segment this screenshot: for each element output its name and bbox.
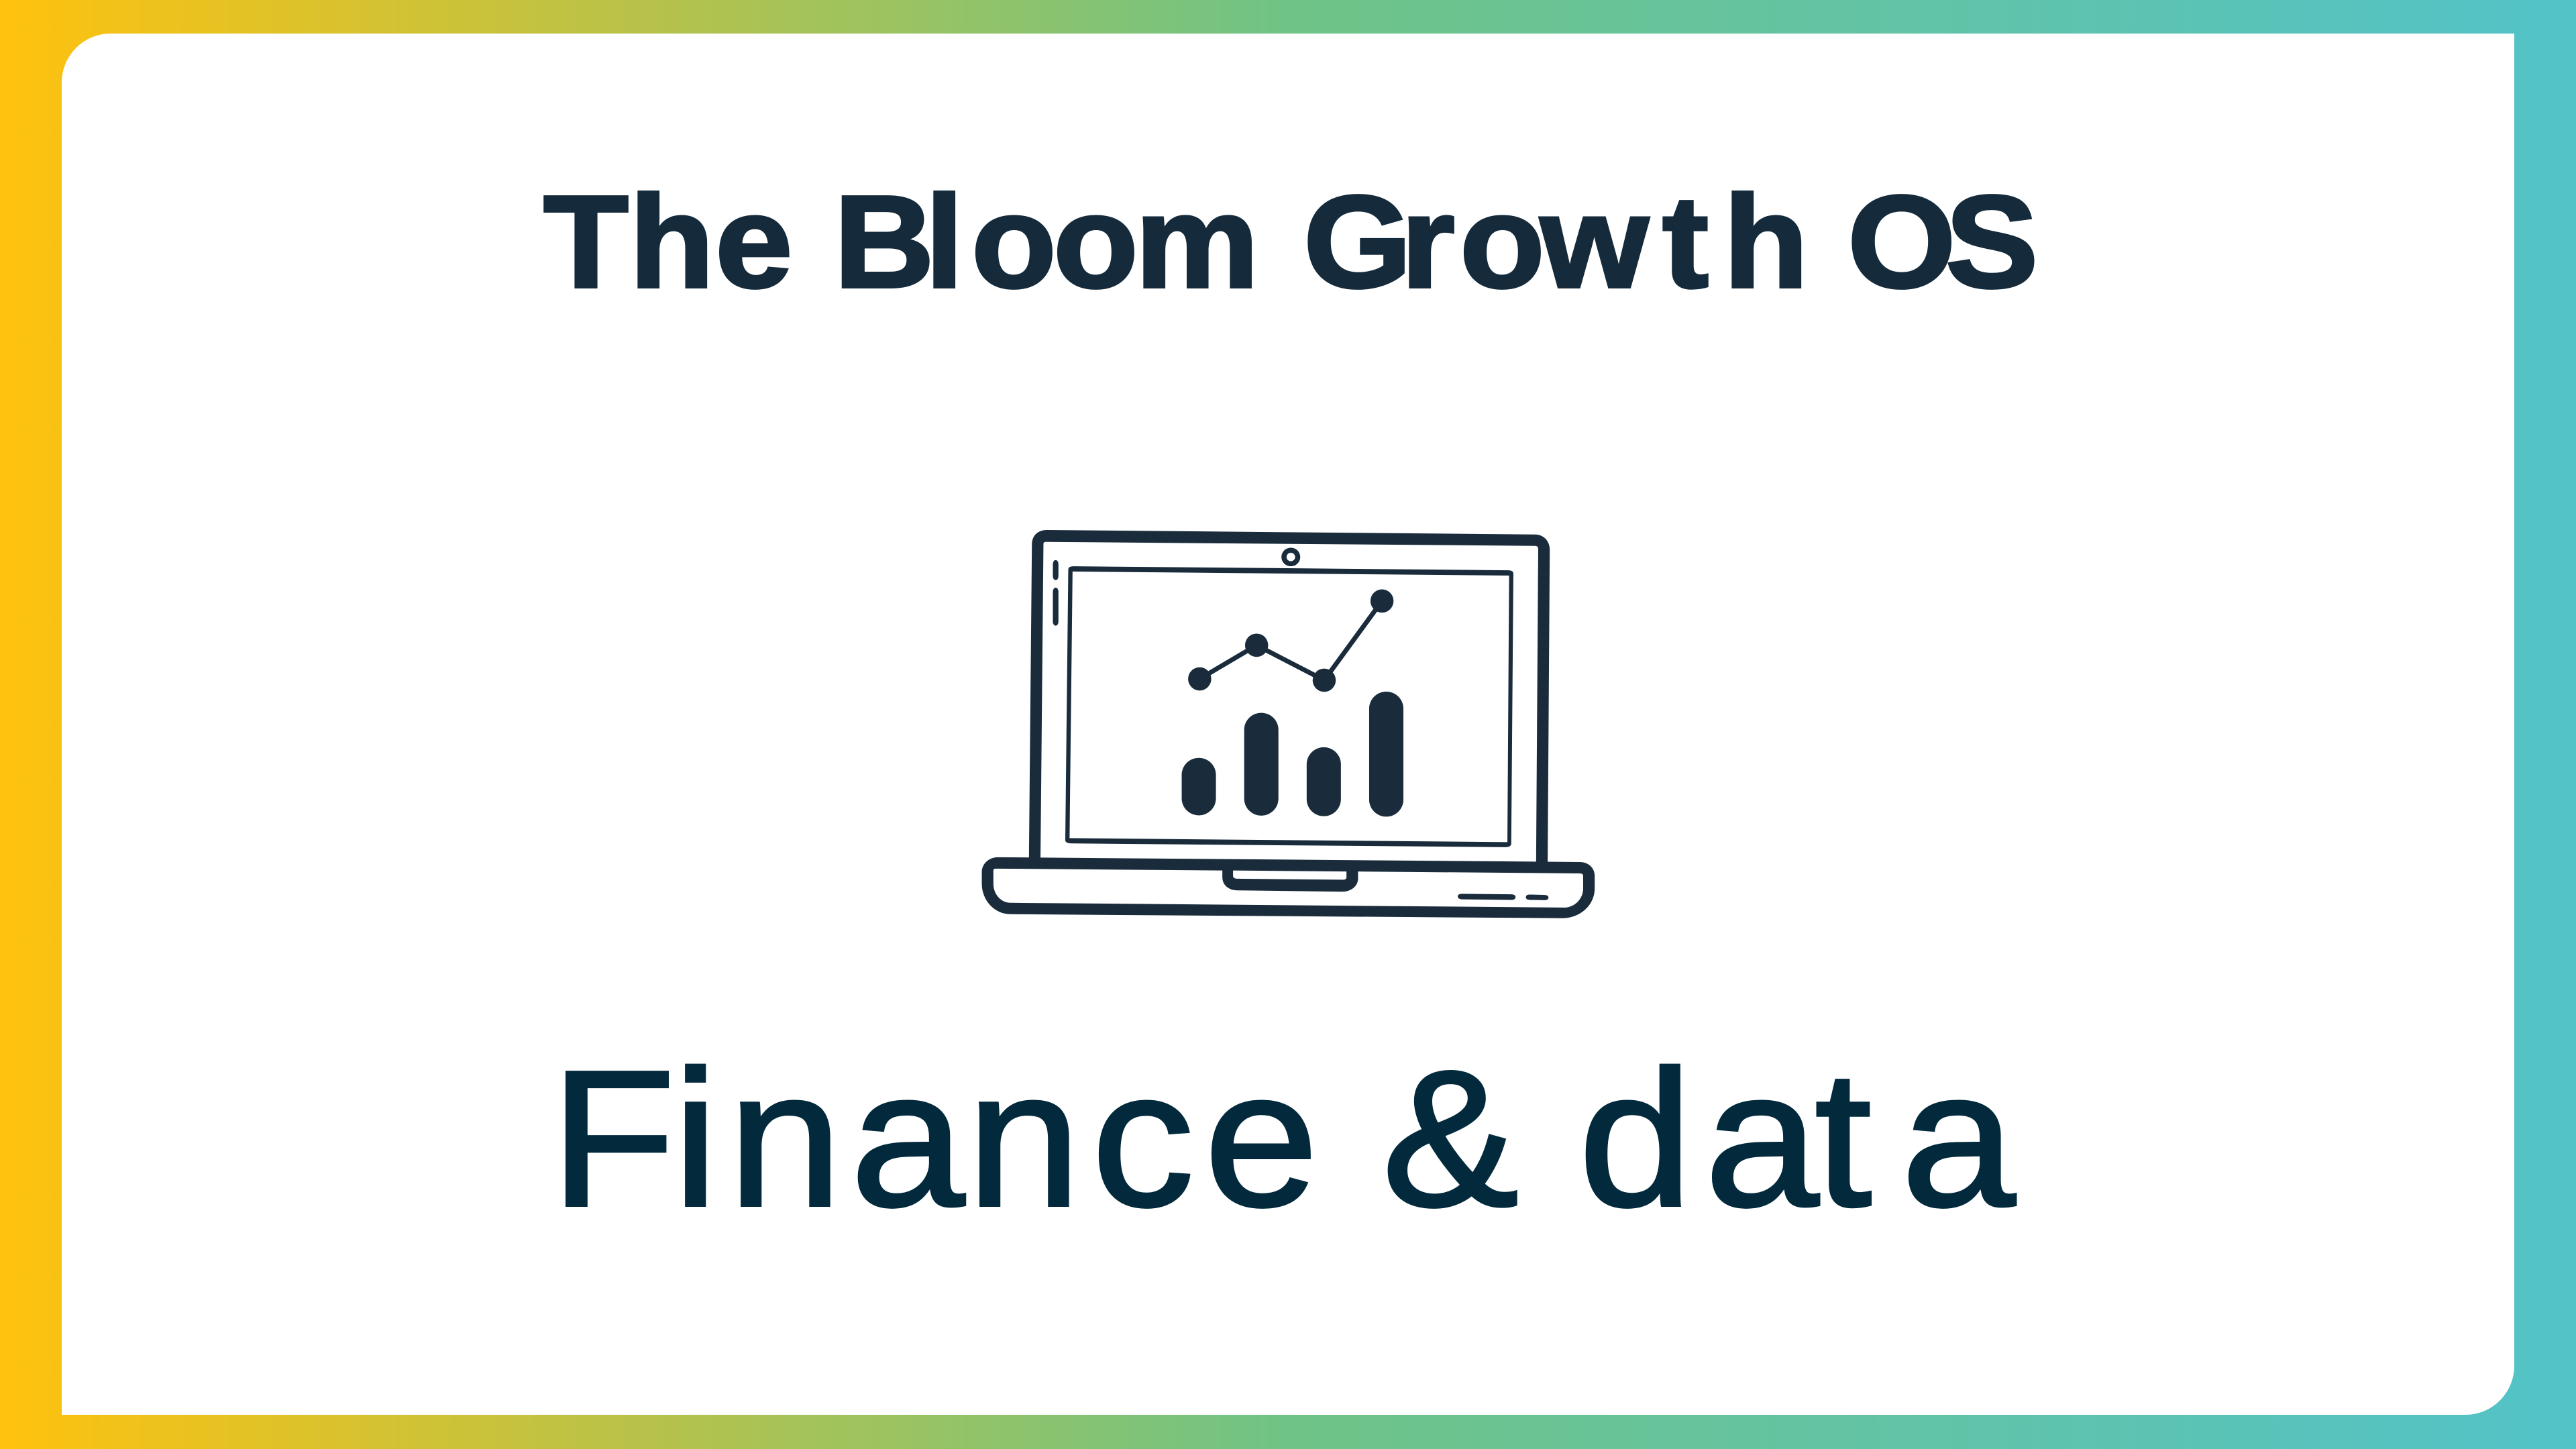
line chart xyxy=(1188,590,1393,692)
title: The Bloom Growth OS xyxy=(543,168,2039,315)
laptop lid xyxy=(1029,530,1550,867)
bezel marks xyxy=(1053,560,1059,626)
icon: webcam xyxy=(1281,547,1300,566)
bar chart xyxy=(1182,692,1403,816)
screen outline xyxy=(1065,566,1513,847)
icon: laptop with charts xyxy=(982,530,1595,918)
base indicators xyxy=(1458,894,1548,900)
laptop base xyxy=(982,857,1595,918)
subtitle: Finance & data xyxy=(550,1030,2017,1247)
